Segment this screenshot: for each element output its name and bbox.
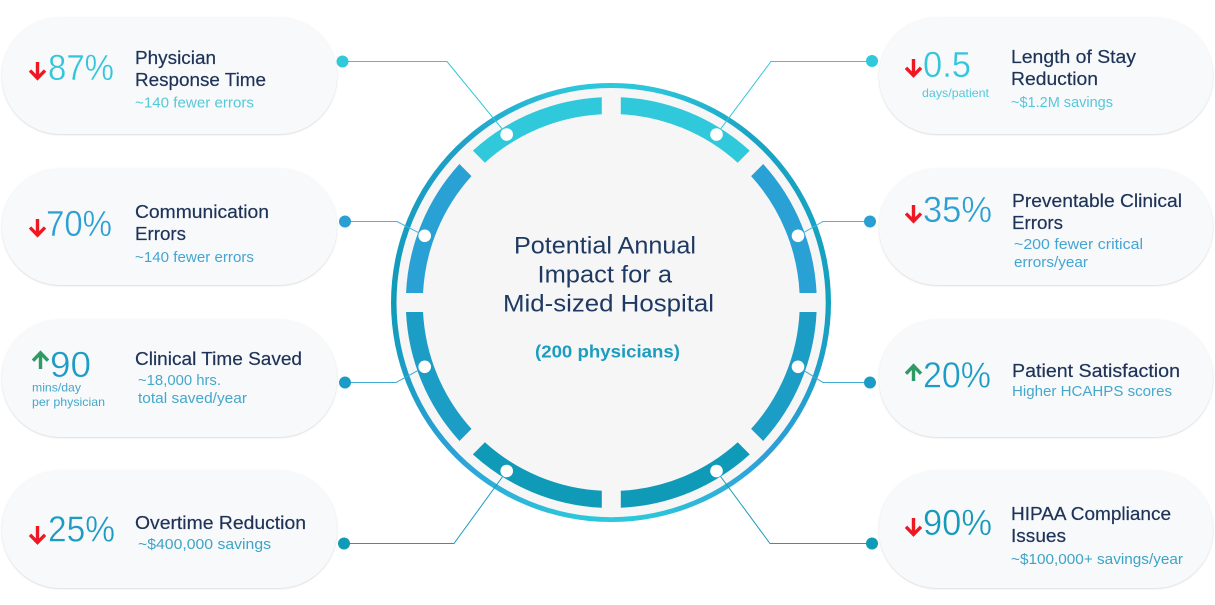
center heading: Potential Annual: [514, 232, 696, 259]
detail: total saved/year: [138, 391, 247, 407]
icon: down arrow: [30, 62, 45, 78]
detail: ~200 fewer critical: [1014, 237, 1143, 253]
segment: preventable clinical errors: [751, 164, 817, 293]
connector: overtime reduction: [338, 465, 513, 550]
detail: [138, 373, 247, 407]
title: [1012, 190, 1182, 233]
title: Errors: [135, 223, 186, 244]
connector: communication errors: [339, 216, 431, 242]
segment: hipaa compliance: [621, 442, 750, 508]
panel: length of stay reduction: [879, 18, 1213, 134]
title: Response Time: [135, 69, 266, 90]
panel: clinical time saved: [2, 320, 337, 437]
detail: ~18,000 hrs.: [138, 373, 221, 389]
connector: physician response time: [336, 56, 513, 141]
title: Overtime Reduction: [135, 512, 306, 533]
panel: preventable clinical errors: [879, 169, 1213, 285]
title: Preventable Clinical: [1012, 190, 1182, 211]
segment: patient satisfaction: [751, 312, 817, 441]
outer gradient ring: [391, 83, 831, 522]
detail: ~$100,000+ savings/year: [1011, 552, 1183, 568]
icon: down arrow: [906, 205, 921, 221]
title: [135, 47, 266, 90]
title: Physician: [135, 47, 216, 68]
stat: 0.5: 0.5: [923, 44, 971, 85]
title: Length of Stay: [1011, 46, 1137, 67]
title: Reduction: [1011, 68, 1098, 89]
segment: physician response time: [473, 97, 602, 163]
panel: communication errors: [2, 169, 337, 285]
detail: Higher HCAHPS scores: [1012, 384, 1172, 400]
detail: ~140 fewer errors: [135, 96, 254, 112]
connector: length of stay: [710, 55, 878, 141]
title: Issues: [1011, 525, 1066, 546]
icon: down arrow: [906, 518, 921, 534]
title: [135, 201, 269, 244]
stat: 90%: 90%: [923, 502, 992, 543]
stat: 25%: 25%: [48, 509, 115, 550]
stat: 87%: 87%: [48, 47, 114, 88]
segmented inner ring: [406, 97, 817, 508]
stat: 35%: 35%: [923, 189, 992, 230]
detail: ~140 fewer errors: [135, 250, 254, 266]
panel: hipaa compliance issues: [879, 471, 1213, 588]
title: HIPAA Compliance: [1011, 503, 1171, 524]
stat: 70%: 70%: [46, 203, 112, 244]
stat: 20%: 20%: [923, 355, 991, 396]
segment: length of stay: [621, 97, 750, 163]
panel: physician response time: [2, 18, 337, 134]
panel: overtime reduction: [2, 471, 337, 588]
connector: hipaa compliance: [710, 465, 878, 550]
panel: patient satisfaction: [879, 320, 1213, 437]
center heading: Mid-sized Hospital: [503, 291, 714, 318]
icon: up arrow: [33, 353, 48, 369]
segment: overtime reduction: [473, 442, 602, 508]
stat unit: [32, 381, 105, 409]
title: [1011, 503, 1171, 546]
center heading: Impact for a: [538, 262, 673, 289]
icon: up arrow: [906, 366, 921, 381]
center heading: [503, 232, 714, 318]
detail: ~$1.2M savings: [1011, 95, 1113, 111]
detail: errors/year: [1014, 255, 1088, 271]
center disc: [396, 88, 826, 517]
detail: [1014, 237, 1143, 271]
segment: communication errors: [406, 164, 472, 293]
connector: clinical time saved: [339, 360, 431, 388]
segment: clinical time saved: [406, 312, 472, 441]
connector: patient satisfaction: [792, 360, 876, 388]
stat: 90: 90: [50, 344, 91, 385]
center subheading: (200 physicians): [535, 342, 680, 362]
icon: down arrow: [906, 59, 921, 76]
title: Errors: [1012, 212, 1063, 233]
connector: preventable clinical errors: [792, 216, 876, 242]
stat unit: per physician: [32, 395, 105, 409]
detail: ~$400,000 savings: [138, 537, 271, 553]
icon: down arrow: [30, 219, 45, 235]
title: Clinical Time Saved: [135, 348, 302, 369]
icon: down arrow: [30, 526, 45, 542]
title: Patient Satisfaction: [1012, 360, 1180, 381]
stat unit: days/patient: [922, 86, 990, 100]
stat unit: mins/day: [32, 381, 81, 395]
title: [1011, 46, 1137, 89]
title: Communication: [135, 201, 269, 222]
